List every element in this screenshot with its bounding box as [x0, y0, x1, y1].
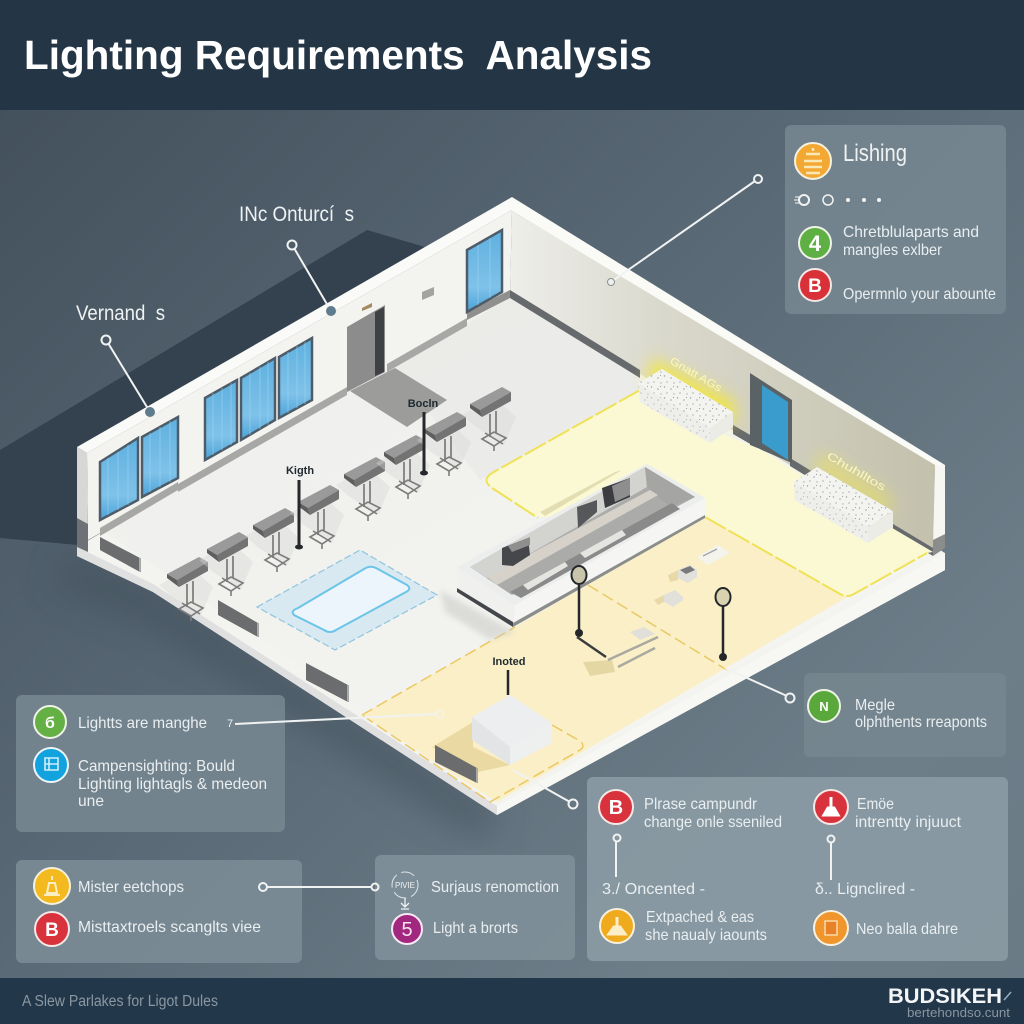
text: Campensighting: Bould: [78, 758, 235, 775]
wall door: [347, 305, 385, 392]
wall light block 1: [638, 355, 733, 443]
wall sign: [422, 287, 434, 300]
step dots: [794, 195, 881, 205]
window panes: [100, 230, 502, 520]
icon: outline badge: PlVIE: [395, 881, 415, 890]
text: Opermnlo your abounte: [843, 286, 996, 303]
connector: top right: [608, 175, 762, 286]
footer logo: [888, 985, 1011, 1020]
panel: mister: [16, 860, 302, 963]
panel: surjaus: [375, 855, 575, 960]
right wall: [510, 197, 945, 556]
blue floor zone: [257, 550, 437, 650]
icon: purple 5: 5: [401, 919, 413, 941]
text: Lighting lightagls & medeon: [78, 776, 267, 793]
text: Plrase campundr: [644, 796, 758, 813]
label: Vernand s: Vernand s: [76, 302, 165, 325]
icon: outline badge: [392, 872, 418, 909]
icon: red: [799, 269, 831, 301]
text: Mister eetchops: [78, 879, 184, 896]
connector left: [614, 834, 620, 877]
icon: amber: [795, 143, 831, 179]
icon: red person: [814, 790, 848, 824]
zone dashed outlines: [362, 390, 927, 802]
icon: red B: [35, 912, 69, 946]
icon: green: [34, 706, 66, 738]
icon: yellow: [34, 868, 70, 904]
white box with label: Inoted: [492, 656, 526, 668]
floor equipment: [583, 545, 730, 676]
text: Light a brorts: [433, 920, 518, 937]
text: Emöe: [857, 796, 894, 813]
icon: purple 5: [392, 914, 422, 944]
yellow glow: [648, 358, 890, 518]
label: Vernand s: [76, 302, 165, 417]
icon: green 4: 4: [809, 231, 822, 256]
text: mangles exlber: [843, 242, 943, 259]
counter equipment: [502, 478, 630, 566]
lamp post 1: [572, 566, 606, 657]
footer logo: bertehondso.cunt: [907, 1005, 1010, 1020]
floor surface: [105, 295, 935, 803]
pole: Kigth: [286, 465, 314, 550]
pole: Bochi: Bocln: [408, 398, 439, 410]
text: intrentty injuuct: [855, 814, 962, 831]
floor plan illustration: [77, 197, 945, 815]
heading: Lishing: [843, 140, 907, 167]
text: Lightts are manghe: [78, 715, 207, 732]
wall light block 1: Gnatt AGs: [668, 355, 724, 395]
icon: green: б: [45, 715, 55, 732]
icon: red B: B: [45, 920, 59, 941]
icon: red B: B: [609, 797, 623, 819]
label: INc Ontrucis: [239, 203, 354, 316]
left wall: [77, 197, 512, 552]
building shadow: [0, 230, 490, 825]
floor slab: [77, 290, 945, 815]
text: Surjaus renomction: [431, 879, 559, 896]
cream lighting zone: [362, 517, 847, 802]
box floor shadow: [432, 722, 510, 772]
icon: amber person: [600, 909, 634, 943]
wall door blue: [750, 373, 792, 463]
title: Lighting Requirements Analysis: [24, 32, 652, 78]
text: she naualy iaounts: [645, 927, 767, 944]
wall light block 2: Chuhlltos: [824, 450, 888, 494]
grey floor mat: [350, 368, 447, 427]
text: une: [78, 793, 104, 810]
text: Extpached & eas: [646, 909, 754, 926]
text: olphthents rreaponts: [855, 714, 987, 731]
icon: red B: [599, 790, 633, 824]
pole: Kigth: Kigth: [286, 465, 314, 477]
panel: lights: [16, 695, 444, 832]
icon: green: N: [819, 699, 829, 714]
text: δ.. Lignclired -: [815, 881, 915, 898]
text: Misttaxtroels scanglts viee: [78, 919, 261, 936]
connector: mister to surjaus: [259, 883, 378, 891]
footer note: A Slew Parlakes for Ligot Dules: [22, 993, 218, 1010]
footer bar: [0, 978, 1024, 1024]
connector right: [828, 836, 834, 880]
label: INc Ontrucis: INc Onturcí s: [239, 203, 354, 226]
benches: [159, 387, 516, 621]
pale yellow lighting zone: [486, 390, 933, 597]
connector: zone right: [725, 668, 794, 702]
connector: 7: [227, 710, 444, 730]
floor edge blocks: [100, 537, 477, 783]
sunken counter: [440, 464, 705, 640]
icon: orange: [814, 911, 848, 945]
connector: zone bottom: [513, 770, 578, 808]
text: change onle sseniled: [644, 814, 782, 831]
text: Megle: [855, 697, 895, 714]
panel: phrase: [587, 777, 1008, 961]
text: 3./ Oncented -: [602, 881, 705, 898]
white box with label: [472, 656, 552, 765]
icon: green 4: [799, 227, 831, 259]
wall light block 2: [794, 450, 893, 543]
footer logo: BUDSIKEH: [888, 985, 1002, 1008]
panel: megle: [804, 673, 1006, 757]
pole: Bochi: [408, 398, 439, 476]
connector: 7: 7: [227, 718, 233, 730]
panel: lighting: [785, 125, 1006, 314]
lamp post 2: [716, 588, 730, 661]
text: Chretblulaparts and: [843, 224, 979, 241]
header bar: [0, 0, 1024, 110]
text: Neo balla dahre: [856, 921, 958, 938]
icon: red: B: [808, 276, 822, 297]
icon: green: [808, 690, 840, 722]
icon: blue: [34, 748, 68, 782]
